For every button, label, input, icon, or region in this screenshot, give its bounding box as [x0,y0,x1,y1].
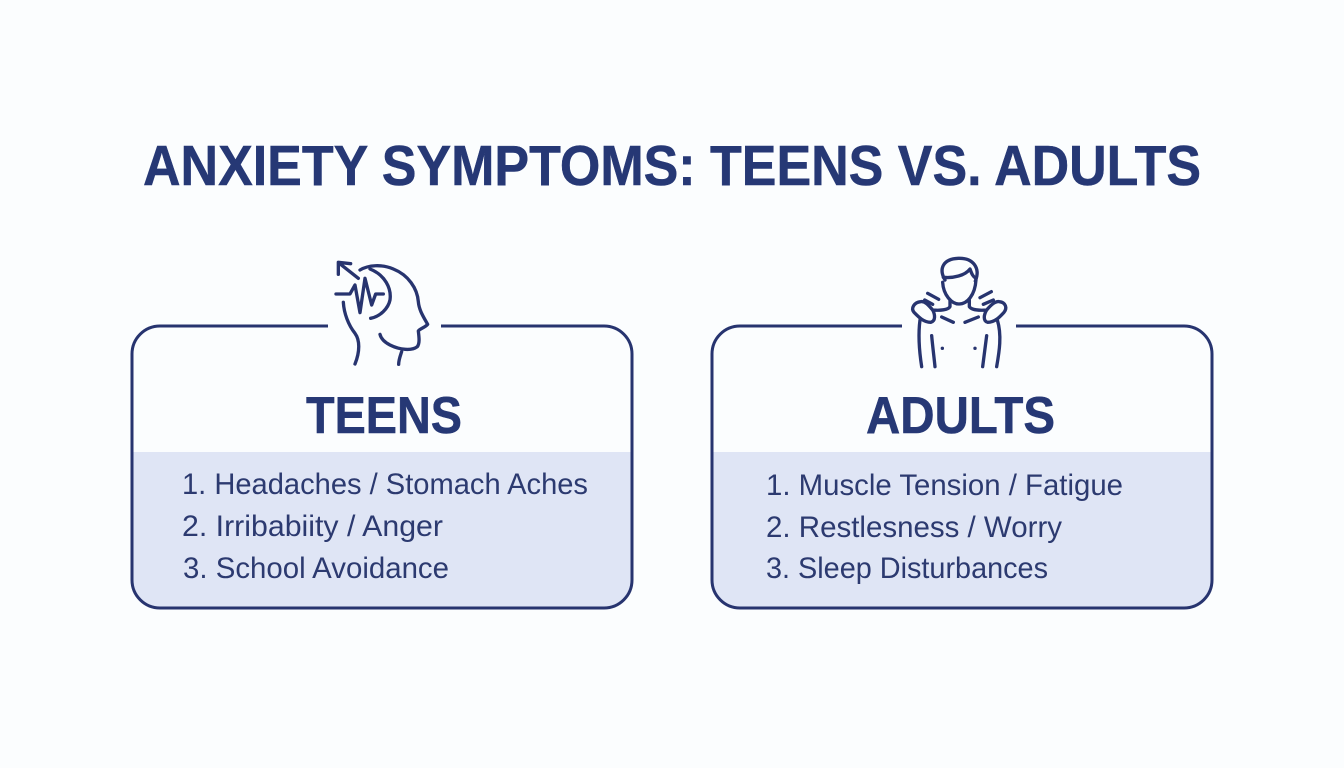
panel border: teens [132,326,632,608]
list: adults symptoms: 1. Muscle Tension / Fatigue [766,469,1123,502]
icon: person with shoulder tension [913,258,1006,367]
panel: adults [712,258,1212,608]
title: ANXIETY SYMPTOMS: TEENS VS. ADULTS [143,134,1201,198]
list: adults symptoms: 2. Restlesness / Worry [766,511,1062,544]
list: adults symptoms: 3. Sleep Disturbances [766,552,1048,585]
panel border: adults [712,326,1212,608]
list: teens symptoms [182,468,588,585]
panel fill: teens symptoms band [133,452,631,607]
list: adults symptoms [766,469,1123,585]
panel: teens [132,262,632,608]
list: teens symptoms: 3. School Avoidance [183,552,449,585]
heading: teens: TEENS [306,387,462,445]
list: teens symptoms: 2. Irribabiity / Anger [182,510,443,543]
panel fill: adults symptoms band [713,452,1211,607]
icon: head with pulse and arrow [336,262,428,364]
heading: adults: ADULTS [866,387,1055,445]
list: teens symptoms: 1. Headaches / Stomach Aches [182,468,588,501]
